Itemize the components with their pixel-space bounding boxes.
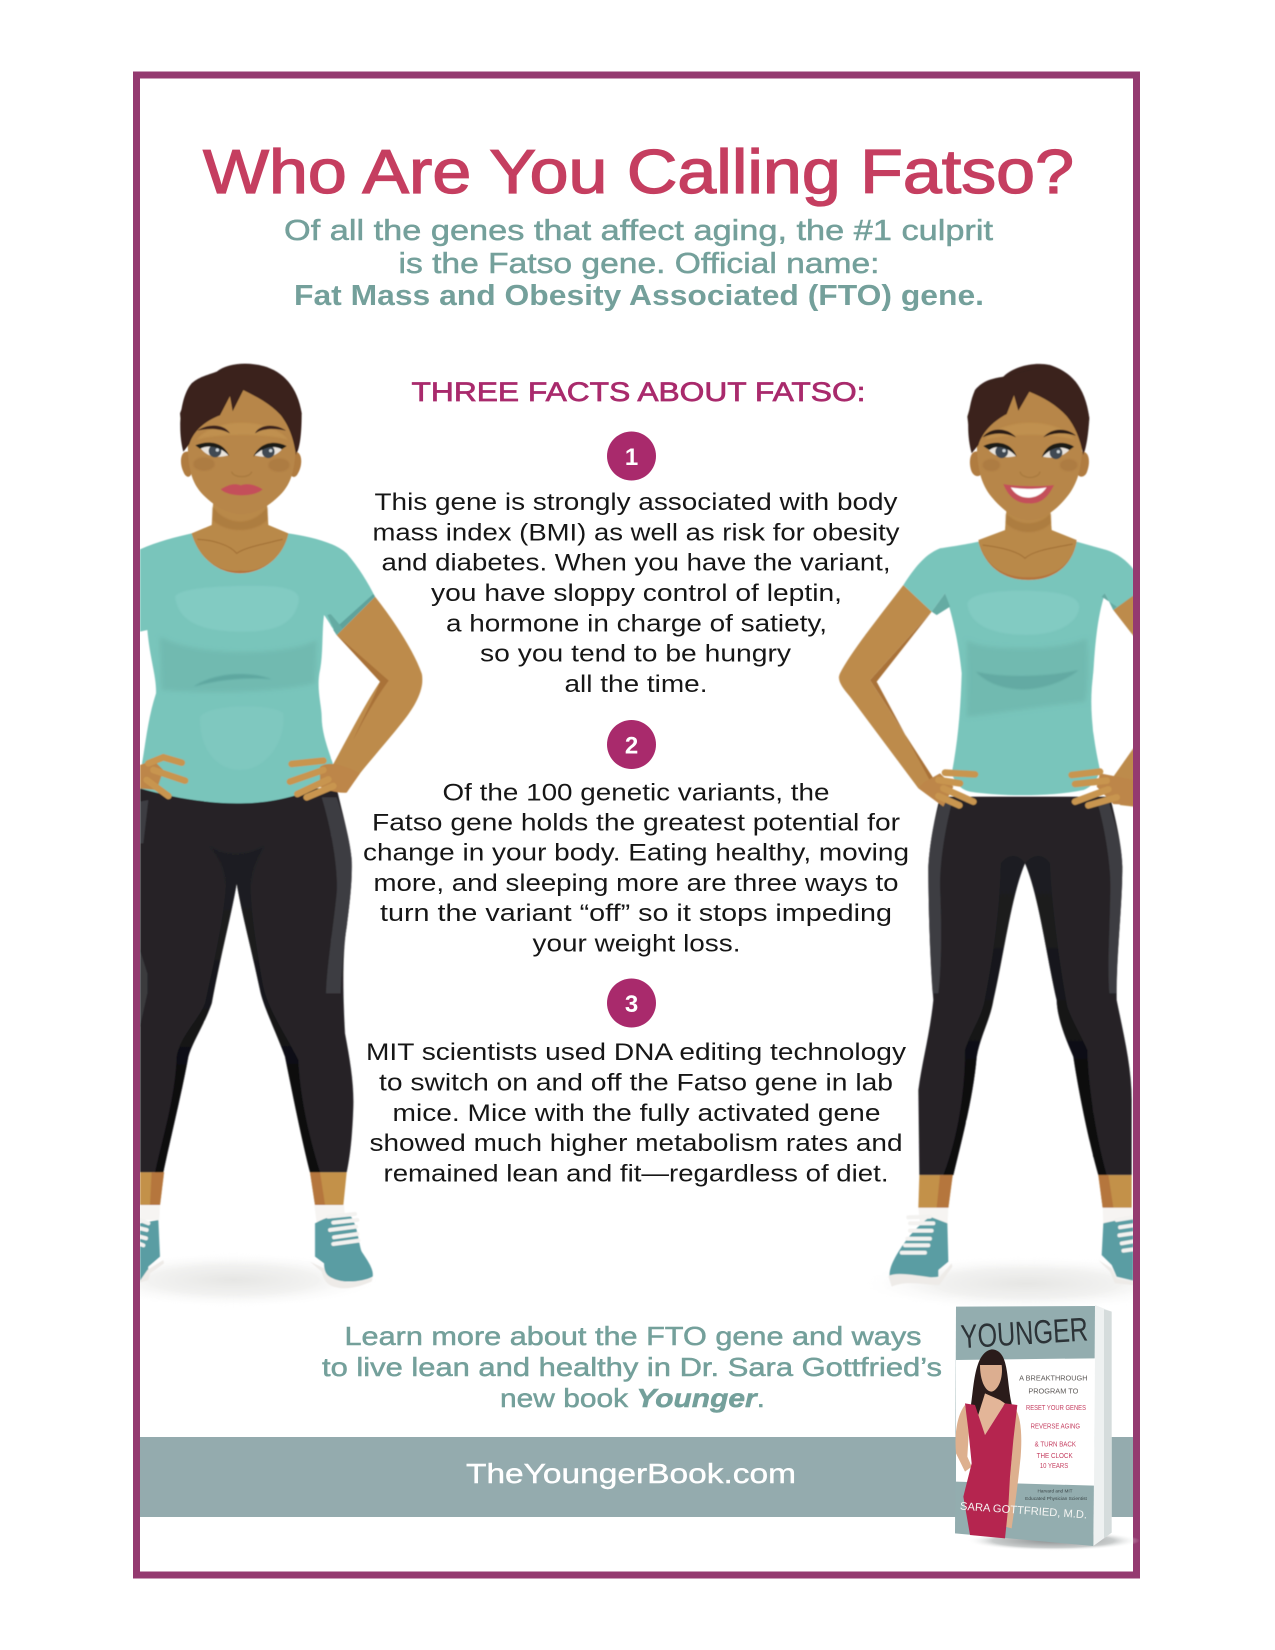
fact 1 number badge: 1 — [625, 444, 638, 471]
fact 2 text: change in your body. Eating healthy, moving — [363, 840, 909, 867]
fact 2 text: Of the 100 genetic variants, the — [442, 780, 830, 806]
fact 2 text — [363, 780, 909, 958]
floor shadow — [77, 1252, 390, 1308]
face — [188, 390, 296, 514]
fact 1 text: This gene is strongly associated with body — [374, 489, 898, 516]
fact 3 text — [366, 1039, 906, 1188]
neck — [192, 500, 288, 571]
fact 3 number badge — [607, 978, 656, 1028]
hands — [140, 757, 360, 797]
eyes and brows — [983, 430, 1076, 459]
section heading: THREE FACTS ABOUT FATSO: — [412, 377, 866, 407]
hair back — [180, 364, 302, 455]
collarbone shading — [983, 513, 1073, 558]
forehead highlight — [990, 424, 1070, 437]
ears — [181, 452, 301, 477]
fact 1 text: and diabetes. When you have the variant, — [382, 550, 890, 577]
footer call to action: new book Younger . — [500, 1383, 765, 1413]
fact 2 text: more, and sleeping more are three ways to — [374, 870, 898, 897]
fact 2 text: Fatso gene holds the greatest potential for — [372, 810, 900, 836]
fact 2 number badge — [607, 720, 656, 769]
face — [977, 390, 1082, 520]
cover text: REVERSE AGING — [1031, 1424, 1080, 1431]
cover text: Educated Physician Scientist — [1025, 1496, 1088, 1501]
fact 1 number badge — [607, 432, 656, 480]
fact 3 text: showed much higher metabolism rates and — [370, 1130, 902, 1157]
fact 1 text: a hormone in charge of satiety, — [446, 610, 827, 637]
hair back — [968, 364, 1089, 455]
arm — [330, 597, 422, 792]
subtitle: Of all the genes that affect aging, the #1 culprit — [284, 215, 993, 247]
fact 1 text: mass index (BMI) as well as risk for obesity — [372, 519, 900, 546]
cheeks — [194, 458, 288, 471]
hands — [918, 772, 1134, 807]
subtitle — [284, 215, 993, 312]
fact 3 text: to switch on and off the Fatso gene in lab — [379, 1070, 893, 1097]
cover text: PROGRAM TO — [1028, 1388, 1079, 1395]
subtitle: Fat Mass and Obesity Associated (FTO) gene. — [294, 280, 984, 312]
illustration: happy woman with gene turned off — [838, 363, 1133, 1302]
footer call to action: Learn more about the FTO gene and ways — [344, 1321, 922, 1351]
website band — [140, 1437, 1133, 1517]
footer call to action: to live lean and healthy in Dr. Sara Gottfried’s — [322, 1352, 942, 1382]
cover text — [1019, 1376, 1088, 1501]
illustration: unhappy woman with variant — [140, 362, 424, 1298]
fact 2 text: your weight loss. — [532, 930, 740, 958]
ankles — [140, 1172, 347, 1205]
nose — [232, 472, 252, 477]
cover text: A BREAKTHROUGH — [1019, 1376, 1087, 1383]
nose — [1020, 472, 1040, 477]
fact 3 text: mice. Mice with the fully activated gene — [392, 1100, 880, 1127]
fact 1 text: you have sloppy control of leptin, — [431, 580, 842, 607]
cover text: & TURN BACK — [1035, 1442, 1076, 1449]
cover text: THE CLOCK — [1037, 1453, 1073, 1460]
forehead highlight — [202, 424, 283, 437]
book shadow — [967, 1531, 1140, 1551]
sad lips — [221, 484, 263, 495]
page frame border — [136, 75, 1136, 1575]
shirt — [903, 542, 1134, 795]
fact 1 text: all the time. — [564, 671, 708, 698]
fringe — [180, 366, 302, 455]
website band: TheYoungerBook.com — [466, 1458, 796, 1489]
footer call to action — [322, 1321, 942, 1413]
smile — [1003, 484, 1054, 503]
cover text: Harvard and MIT — [1037, 1489, 1073, 1494]
page block — [1093, 1305, 1112, 1546]
cheeks — [984, 460, 1076, 470]
sneakers — [888, 1208, 1133, 1287]
arms — [839, 585, 1134, 807]
cover white panel — [956, 1358, 1095, 1486]
cover title: YOUNGER — [960, 1312, 1089, 1356]
fact 2 text: turn the variant “off” so it stops impeding — [380, 900, 892, 927]
cover text: 10 YEARS — [1040, 1463, 1068, 1470]
legs and leggings — [918, 797, 1132, 1175]
author photo — [956, 1349, 1021, 1538]
floor shadow — [912, 1262, 1133, 1302]
shirt — [140, 533, 375, 803]
ankles — [918, 1175, 1132, 1208]
fact 3 text: remained lean and fit—regardless of diet. — [384, 1160, 888, 1188]
neck — [978, 507, 1077, 577]
book cover — [955, 1305, 1140, 1551]
fact 1 text: so you tend to be hungry — [480, 640, 791, 668]
cover background — [955, 1306, 1095, 1546]
fringe — [967, 365, 1089, 455]
sneakers — [140, 1205, 373, 1288]
fact 1 text — [372, 489, 900, 698]
cover text: RESET YOUR GENES — [1026, 1405, 1086, 1412]
collarbone shading — [197, 507, 283, 553]
eyes and brows — [195, 425, 287, 458]
title: Who Are You Calling Fatso? — [203, 138, 1074, 207]
cover author name: SARA GOTTFRIED, M.D. — [960, 1501, 1087, 1521]
legs and leggings — [140, 788, 353, 1172]
subtitle: is the Fatso gene. Official name: — [398, 248, 880, 280]
fact 3 text: MIT scientists used DNA editing technology — [366, 1039, 906, 1066]
ears — [970, 451, 1089, 477]
fact 3 number badge: 3 — [625, 991, 638, 1018]
fact 2 number badge: 2 — [625, 732, 638, 760]
